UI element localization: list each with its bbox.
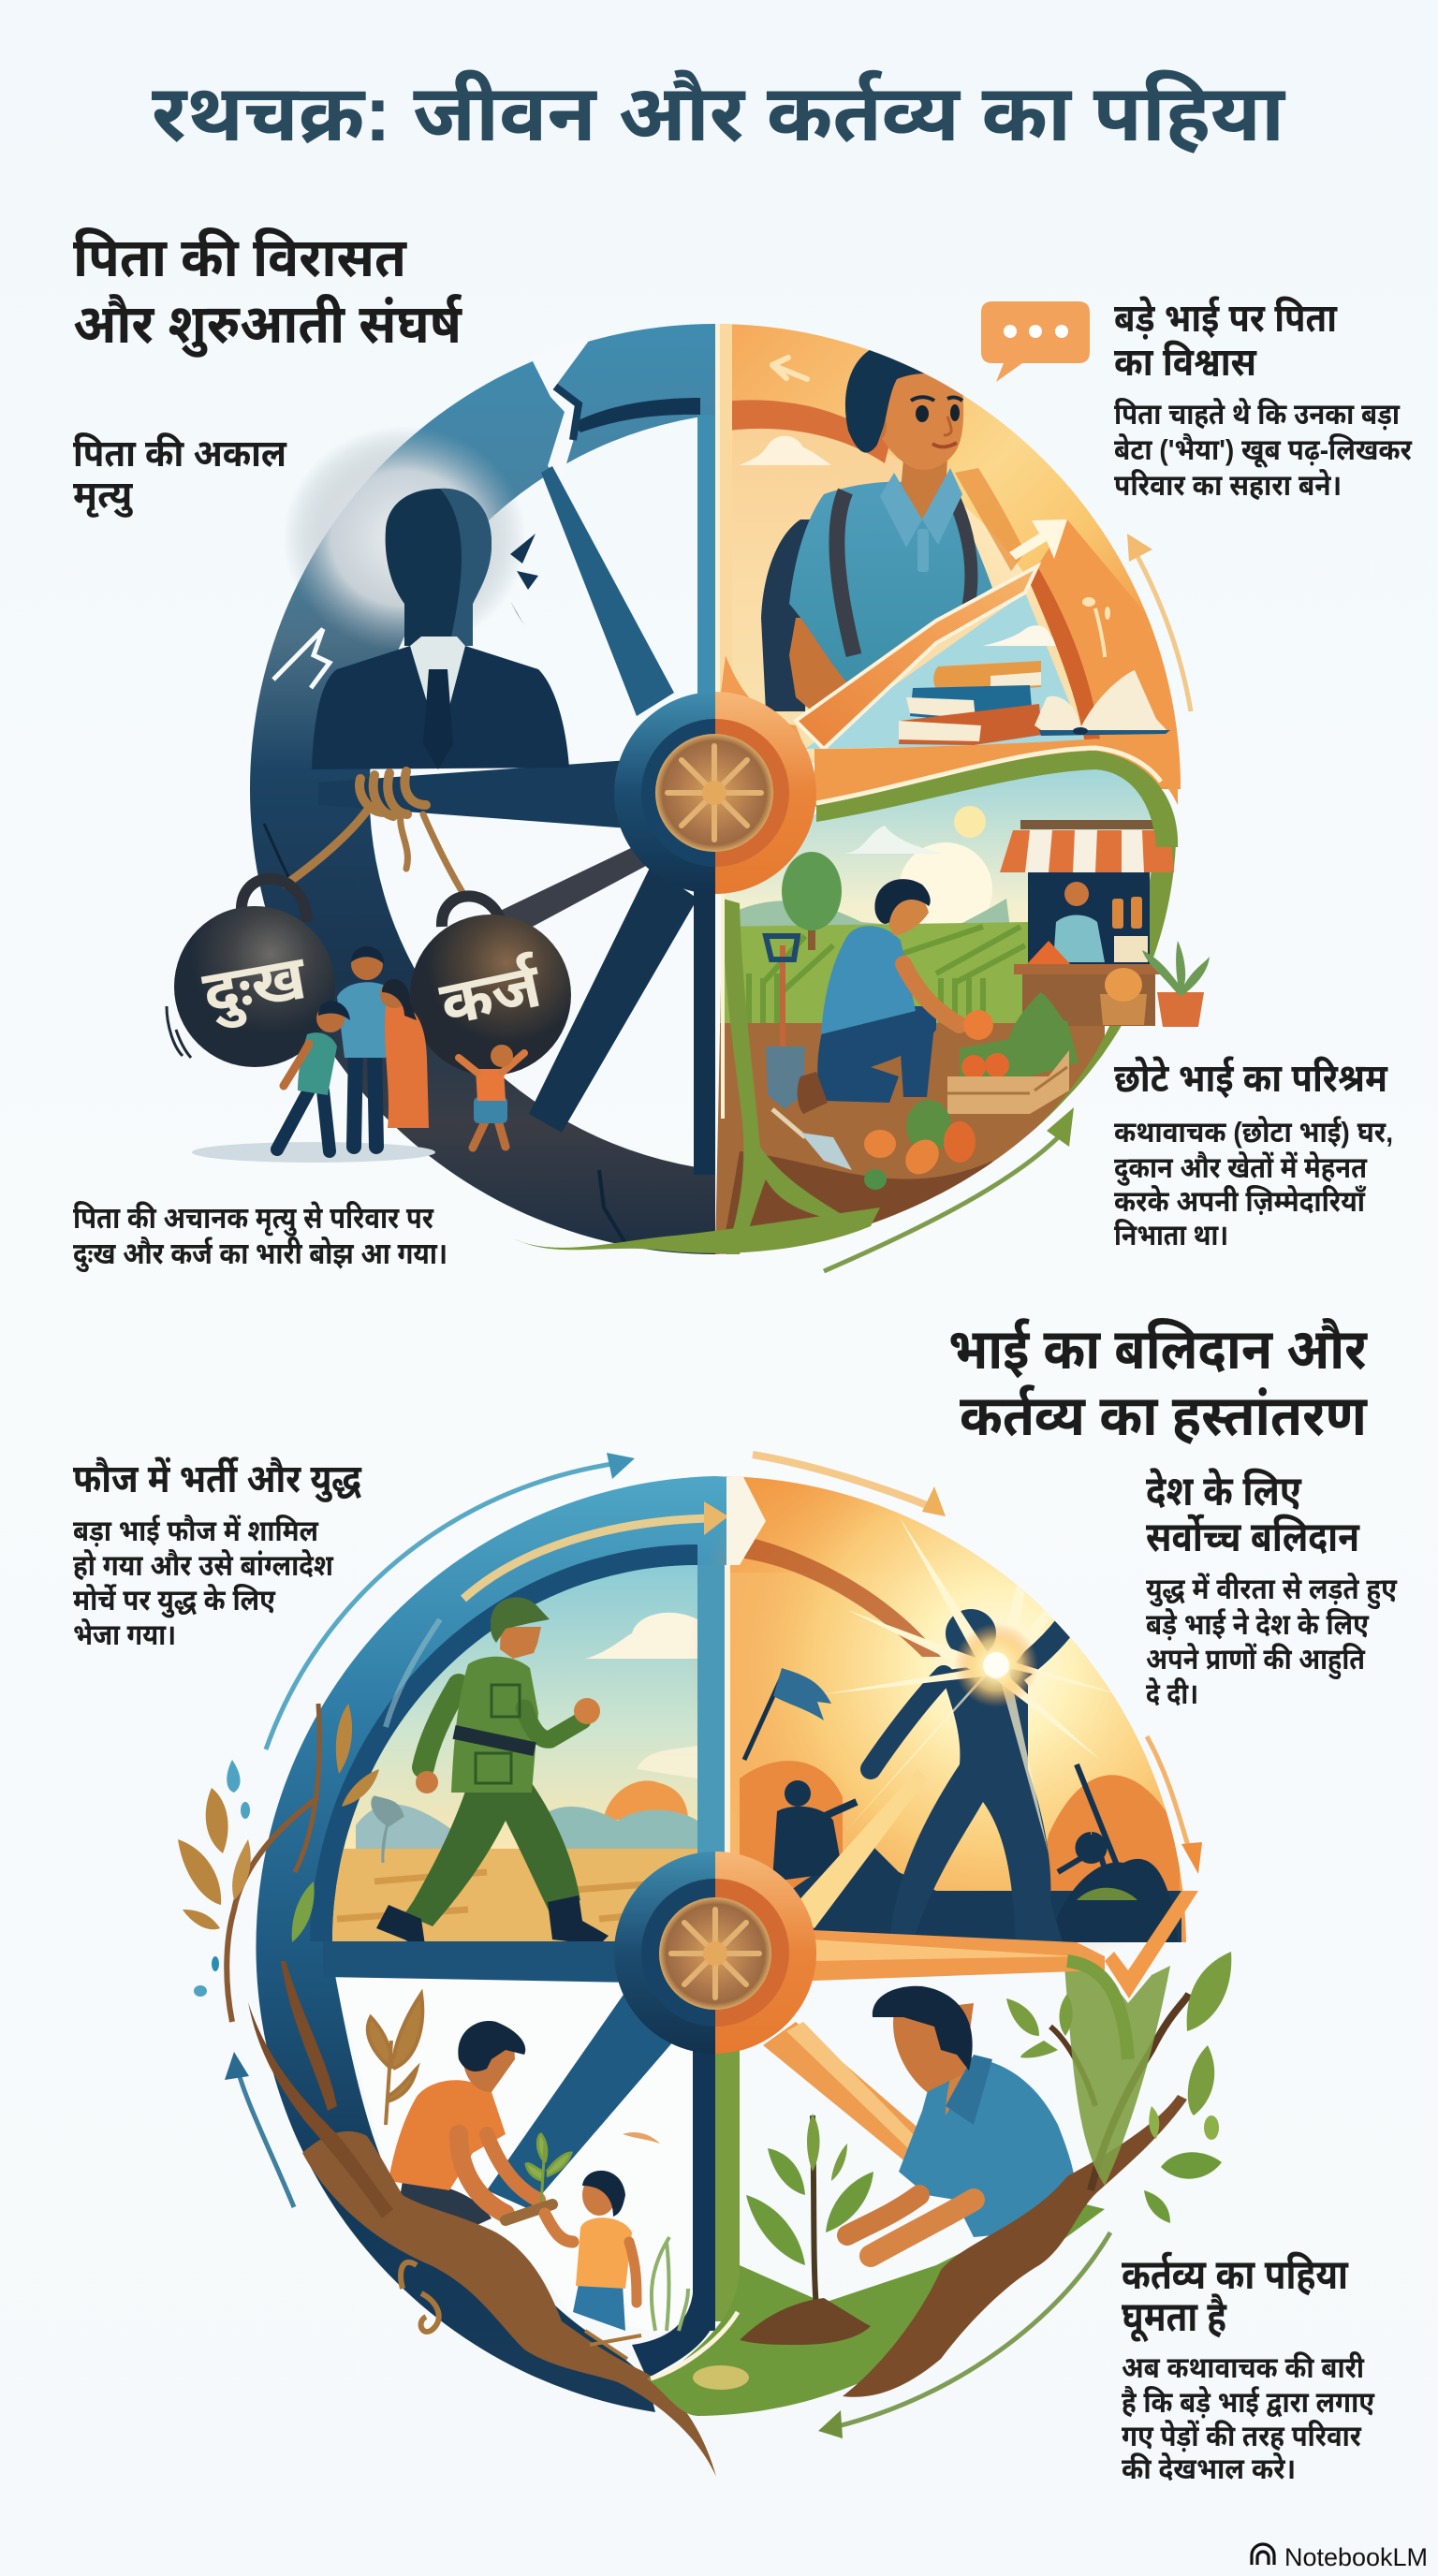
hub: [614, 692, 816, 894]
soil: [715, 1023, 1105, 1259]
callout: trust in elder brother: बेटा ('भैया') खूब पढ़-लिखकर: [1114, 433, 1413, 468]
man: [337, 946, 393, 1147]
spokes: [541, 466, 674, 716]
clouds and sun: [585, 1613, 697, 1659]
arrow: thin orange rising: [1127, 534, 1191, 711]
arrow: thin green rising: [824, 1107, 1074, 1271]
ground: [318, 1849, 712, 1942]
hub disc: [659, 1897, 771, 2010]
vegetable crate: [947, 992, 1078, 1114]
callout: supreme sacrifice: [1146, 1467, 1398, 1710]
text: sudden death label: पिता की अकाल: [73, 432, 287, 475]
title: रथचक्र: जीवन और कर्तव्य का पहिया: [152, 69, 1285, 157]
cloud: [740, 436, 831, 465]
bottom wheel: [178, 1356, 1305, 2477]
boots: [376, 1905, 426, 1952]
callout: supreme sacrifice: अपने प्राणों की आहुति: [1146, 1643, 1366, 1679]
cloud: [843, 826, 946, 854]
right tree: [843, 1891, 1198, 2397]
broken rim: [250, 324, 715, 1254]
callout: younger brother's labour: दुकान और खेतों में मेहनत: [1114, 1151, 1368, 1186]
callout: younger brother's labour: कथावाचक (छोटा भाई) घर,: [1114, 1116, 1393, 1149]
faded haze behind silhouette: [283, 426, 526, 651]
callout: enlisting in army: मोर्चे पर युद्ध के लिए: [73, 1584, 276, 1618]
section heading: father's legacy: पिता की विरासत: [73, 227, 407, 288]
market stall: [1000, 820, 1174, 1026]
section heading: father's legacy: [73, 227, 462, 358]
shards near head: [510, 534, 538, 625]
rim left half: [256, 1476, 766, 2412]
callout: supreme sacrifice: युद्ध में वीरता से लड़ते हुए: [1146, 1573, 1398, 1609]
arrow: orange descending right: [1147, 1736, 1202, 1874]
caption: grief and debt: दुःख और कर्ज का भारी बोझ आ गया।: [73, 1237, 448, 1273]
rope and weights: [167, 771, 571, 1076]
boy pushing: [277, 1001, 350, 1151]
callout: supreme sacrifice: दे दी।: [1146, 1677, 1198, 1710]
callout: younger brother's labour: निभाता था।: [1114, 1219, 1228, 1251]
green vertical band: [715, 2050, 740, 2321]
soldier: [376, 1597, 609, 1952]
callout: wheel of duty turns: घूमता है: [1122, 2292, 1227, 2343]
books stack: [899, 661, 1042, 745]
icon: speech bubble: [981, 301, 1090, 382]
panel: broken left half of wheel: [250, 324, 715, 1254]
horizontal spokes: [323, 1930, 1128, 2059]
callout: trust in elder brother: बड़े भाई पर पिता: [1114, 296, 1338, 340]
sky: [715, 324, 1181, 763]
rope knot: [286, 771, 463, 894]
small sapling held between them: [526, 2134, 571, 2204]
sky patch with clouds: [805, 593, 1086, 749]
hub: [614, 1852, 816, 2054]
boy's head: [875, 373, 963, 470]
arrow: green descending: [818, 2232, 1110, 2438]
open book: [1034, 670, 1170, 736]
navy spoke: [487, 1989, 674, 2209]
rim stripe: [740, 1535, 941, 1657]
green border behind stall: [1150, 847, 1176, 964]
section heading: father's legacy: और शुरुआती संघर्ष: [73, 294, 462, 358]
caption: grief and debt: पिता की अचानक मृत्यु से परिवार पर: [73, 1201, 434, 1237]
arrow: blue over top left: [266, 1453, 635, 1749]
weight: debt: [410, 896, 571, 1076]
callout: younger brother's labour: करके अपनी ज़िम्मेदारियाँ: [1114, 1185, 1367, 1218]
battlefield silhouettes: [794, 1848, 1181, 1942]
family under the burden: [192, 946, 524, 1163]
arrow: orange over top right: [753, 1455, 946, 1516]
burst rays: [824, 1498, 1123, 1853]
callout: younger brother's labour: [1114, 1056, 1393, 1251]
panel: boy with father's trust: [715, 324, 1208, 807]
boy: [761, 326, 992, 725]
callout: wheel of duty turns: है कि बड़े भाई द्वारा लगाए: [1122, 2386, 1375, 2419]
text: sudden death label: मृत्यु: [73, 475, 133, 518]
panel: passing duty to the child: [227, 1704, 716, 2477]
farmer: [798, 879, 993, 1114]
produce on the soil: [772, 1100, 976, 1190]
weight: grief: [174, 879, 335, 1067]
man in blue: [847, 1986, 1077, 2256]
sun: [954, 806, 986, 838]
potted plant: [1100, 941, 1210, 1027]
orange diagonal spoke: [763, 2022, 936, 2172]
logo: NotebookLM: NotebookLM: [1284, 2543, 1428, 2571]
arrow: blue rising left: [225, 2052, 294, 2207]
text: sudden death label: [73, 432, 287, 518]
callout: younger brother's labour: छोटे भाई का परिश्रम: [1114, 1056, 1388, 1100]
sapling: [746, 2114, 873, 2307]
callout: enlisting in army: बड़ा भाई फौज में शामिल: [73, 1515, 319, 1547]
tree: [782, 852, 842, 950]
hub disc: [655, 734, 773, 852]
rising spoke with arrow: [721, 520, 1067, 772]
distant mound and flag: [740, 1761, 843, 1900]
face: [500, 1627, 541, 1659]
diagonal spoke: [800, 1792, 910, 1928]
hills: [740, 899, 1009, 927]
helmet: [491, 1597, 550, 1643]
weight: grief: दुःख: [198, 942, 313, 1032]
farm sky: [720, 769, 1176, 1020]
horizontal orange spoke band: [814, 739, 1178, 807]
hero silhouette: [860, 1609, 1070, 1941]
green lower rim: [647, 2200, 1105, 2416]
caption: grief and debt: [73, 1201, 448, 1273]
saplings behind: [368, 1994, 422, 2125]
callout: wheel of duty turns: कर्तव्य का पहिया: [1122, 2251, 1349, 2298]
rear arm: [423, 1685, 459, 1767]
battlefield sky window: [332, 1565, 697, 1941]
man in orange: [389, 2021, 538, 2242]
rim arrow inside band: [463, 1518, 707, 1599]
callout: trust in elder brother: [1114, 296, 1413, 502]
tree trunk and roots: [248, 1961, 716, 2477]
fields: [715, 922, 1030, 1030]
vertical divider: [697, 1565, 726, 1893]
leaves on the left branch: [178, 1704, 379, 1997]
callout: enlisting in army: [73, 1456, 362, 1651]
vertical divider: [720, 324, 732, 692]
forearm: [524, 1708, 582, 1739]
callout: trust in elder brother: परिवार का सहारा बने।: [1114, 469, 1342, 502]
shovel: [766, 936, 805, 1109]
panel: man planting a tree: [647, 1891, 1231, 2416]
top wheel: [167, 324, 1210, 1271]
callout: trust in elder brother: पिता चाहते थे कि उनका बड़ा: [1114, 398, 1401, 431]
callout: wheel of duty turns: [1122, 2251, 1375, 2485]
panel: supreme sacrifice: [696, 1476, 1186, 1951]
weight: debt: कर्ज: [434, 950, 548, 1038]
panel: younger brother's labour: [715, 739, 1183, 1259]
roots and green tail: [511, 748, 1178, 1254]
lower-left window: [335, 1973, 693, 2333]
callout: supreme sacrifice: बड़े भाई ने देश के लिए: [1146, 1608, 1370, 1641]
callout: supreme sacrifice: देश के लिए: [1146, 1467, 1302, 1515]
callout: enlisting in army: फौज में भर्ती और युद्ध: [73, 1456, 362, 1502]
torso: [451, 1657, 538, 1793]
section heading: brother's sacrifice: भाई का बलिदान और: [948, 1318, 1368, 1381]
child: [545, 2171, 688, 2331]
small child: [459, 1045, 524, 1148]
callout: wheel of duty turns: की देखभाल करे।: [1122, 2452, 1296, 2485]
woman: [380, 979, 429, 1128]
callout: supreme sacrifice: सर्वोच्च बलिदान: [1146, 1514, 1360, 1560]
callout: enlisting in army: हो गया और उसे बांग्लादेश: [73, 1549, 333, 1582]
right leaves: [1006, 1952, 1231, 2223]
rim band: [715, 324, 1181, 789]
section heading: brother's sacrifice: कर्तव्य का हस्तांतरण: [960, 1384, 1369, 1447]
green border right: [1034, 1026, 1122, 1131]
soil mound: [740, 2298, 871, 2345]
panel: soldier enlisting: [256, 1476, 766, 2412]
callout: wheel of duty turns: गए पेड़ों की तरह परिवार: [1122, 2420, 1362, 2452]
legs: [404, 1783, 580, 1926]
section heading: brother's sacrifice: [948, 1318, 1369, 1447]
father silhouette: [312, 489, 569, 769]
callout: enlisting in army: भेजा गया।: [73, 1618, 176, 1651]
callout: wheel of duty turns: अब कथावाचक की बारी: [1122, 2351, 1365, 2384]
callout: trust in elder brother: का विश्वास: [1114, 340, 1257, 384]
